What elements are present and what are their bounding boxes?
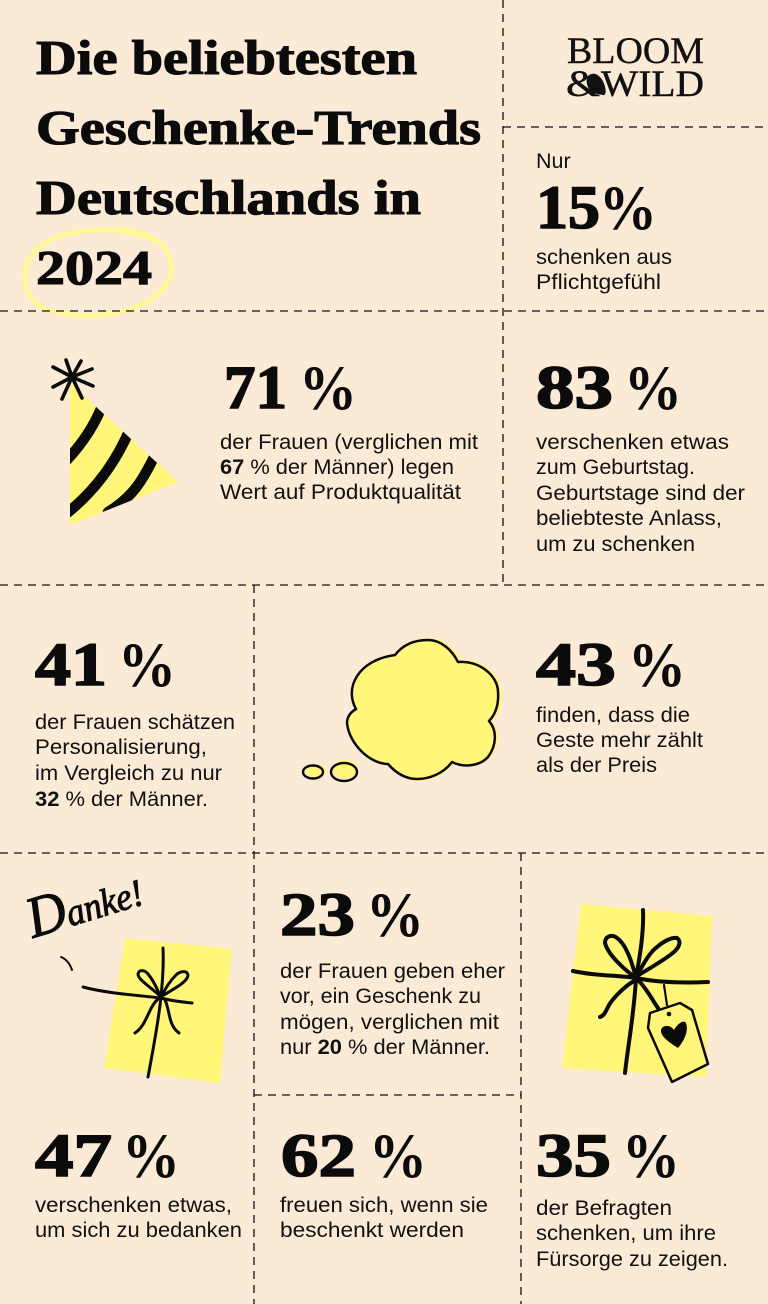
stat: 62 percent: 62 bbox=[281, 1123, 356, 1190]
stat: 83 percent: % bbox=[624, 352, 682, 423]
title: Deutschlands in bbox=[36, 170, 421, 225]
stat: 23 percent: 23 bbox=[280, 882, 355, 949]
stat: 71 percent bbox=[220, 352, 478, 504]
stat: 41 percent bbox=[35, 629, 235, 811]
stat: 35 percent: % bbox=[622, 1120, 680, 1191]
icon: gift with bow bbox=[61, 938, 232, 1083]
icon: gift with tag bbox=[562, 904, 712, 1082]
stat: 41 percent: Personalisierung, bbox=[35, 735, 207, 759]
stat: 35 percent: schenken, um ihre bbox=[536, 1221, 716, 1245]
stat: 83 percent: 83 bbox=[536, 355, 613, 422]
stat: 23 percent: vor, ein Geschenk zu bbox=[280, 984, 481, 1008]
stat: 15 percent: Pflichtgefühl bbox=[536, 270, 661, 294]
stat: 15 percent: schenken aus bbox=[536, 245, 672, 269]
handwritten note: Danke: Danke! bbox=[17, 854, 150, 951]
stat: 62 percent: freuen sich, wenn sie bbox=[280, 1193, 488, 1217]
stat: 71 percent: 67 % der Männer) legen bbox=[220, 455, 454, 479]
stat: 47 percent: verschenken etwas, bbox=[35, 1193, 232, 1217]
logo: Bloom & Wild: & bbox=[566, 64, 600, 105]
icon: thought bubble bbox=[303, 638, 502, 781]
stat: 23 percent: mögen, verglichen mit bbox=[280, 1010, 499, 1034]
stat: 71 percent: der Frauen (verglichen mit bbox=[220, 430, 478, 454]
logo: Bloom & Wild bbox=[566, 31, 704, 105]
stat: 47 percent bbox=[35, 1120, 242, 1242]
stat: 15 percent: Nur bbox=[536, 149, 571, 173]
stat: 43 percent bbox=[536, 629, 703, 777]
stat: 41 percent: 32 % der Männer. bbox=[35, 787, 208, 811]
stat: 62 percent: beschenkt werden bbox=[280, 1218, 464, 1242]
stat: 15 percent bbox=[536, 149, 672, 294]
stat: 43 percent: 43 bbox=[536, 632, 616, 699]
stat: 35 percent: Fürsorge zu zeigen. bbox=[536, 1247, 728, 1271]
stat: 41 percent: im Vergleich zu nur bbox=[35, 761, 222, 785]
icon: party hat bbox=[53, 360, 178, 525]
title: Die beliebtesten bbox=[36, 30, 417, 85]
stat: 47 percent: um sich zu bedanken bbox=[35, 1218, 242, 1242]
stat: 83 percent: Geburtstage sind der bbox=[536, 481, 745, 505]
stat: 35 percent: 35 bbox=[536, 1123, 611, 1190]
stat: 23 percent: % bbox=[366, 879, 424, 950]
stat: 71 percent: 71 bbox=[224, 355, 287, 422]
logo: Bloom & Wild: BLOOM bbox=[567, 31, 704, 72]
stat: 43 percent: % bbox=[628, 629, 686, 700]
stat: 83 percent bbox=[536, 352, 745, 556]
stat: 62 percent bbox=[280, 1120, 488, 1242]
stat: 71 percent: Wert auf Produktqualität bbox=[220, 480, 461, 504]
stat: 15 percent: % bbox=[599, 172, 657, 243]
stat: 47 percent: % bbox=[122, 1120, 180, 1191]
stat: 83 percent: beliebteste Anlass, bbox=[536, 506, 722, 530]
stat: 83 percent: zum Geburtstag. bbox=[536, 455, 695, 479]
title: 2024 bbox=[36, 240, 152, 295]
stat: 62 percent: % bbox=[369, 1120, 427, 1191]
stat: 83 percent: verschenken etwas bbox=[536, 430, 729, 454]
logo: Bloom & Wild: WILD bbox=[601, 64, 704, 105]
stat: 71 percent: % bbox=[299, 352, 357, 423]
stat: 41 percent: % bbox=[118, 629, 176, 700]
stat: 47 percent: 47 bbox=[35, 1123, 112, 1190]
title bbox=[36, 30, 481, 295]
stat: 41 percent: 41 bbox=[35, 632, 107, 699]
stat: 23 percent: der Frauen geben eher bbox=[280, 959, 505, 983]
stat: 35 percent bbox=[536, 1120, 728, 1271]
stat: 35 percent: der Befragten bbox=[536, 1196, 672, 1220]
title: Geschenke-Trends bbox=[36, 100, 481, 155]
stat: 43 percent: finden, dass die bbox=[536, 703, 690, 727]
stat: 23 percent bbox=[280, 879, 505, 1059]
stat: 23 percent: nur 20 % der Männer. bbox=[280, 1035, 490, 1059]
highlight circle around 2024 bbox=[25, 229, 171, 316]
stat: 43 percent: als der Preis bbox=[536, 753, 657, 777]
stat: 83 percent: um zu schenken bbox=[536, 532, 695, 556]
stat: 15 percent: 15 bbox=[536, 175, 600, 242]
stat: 41 percent: der Frauen schätzen bbox=[35, 710, 235, 734]
stat: 43 percent: Geste mehr zählt bbox=[536, 728, 703, 752]
